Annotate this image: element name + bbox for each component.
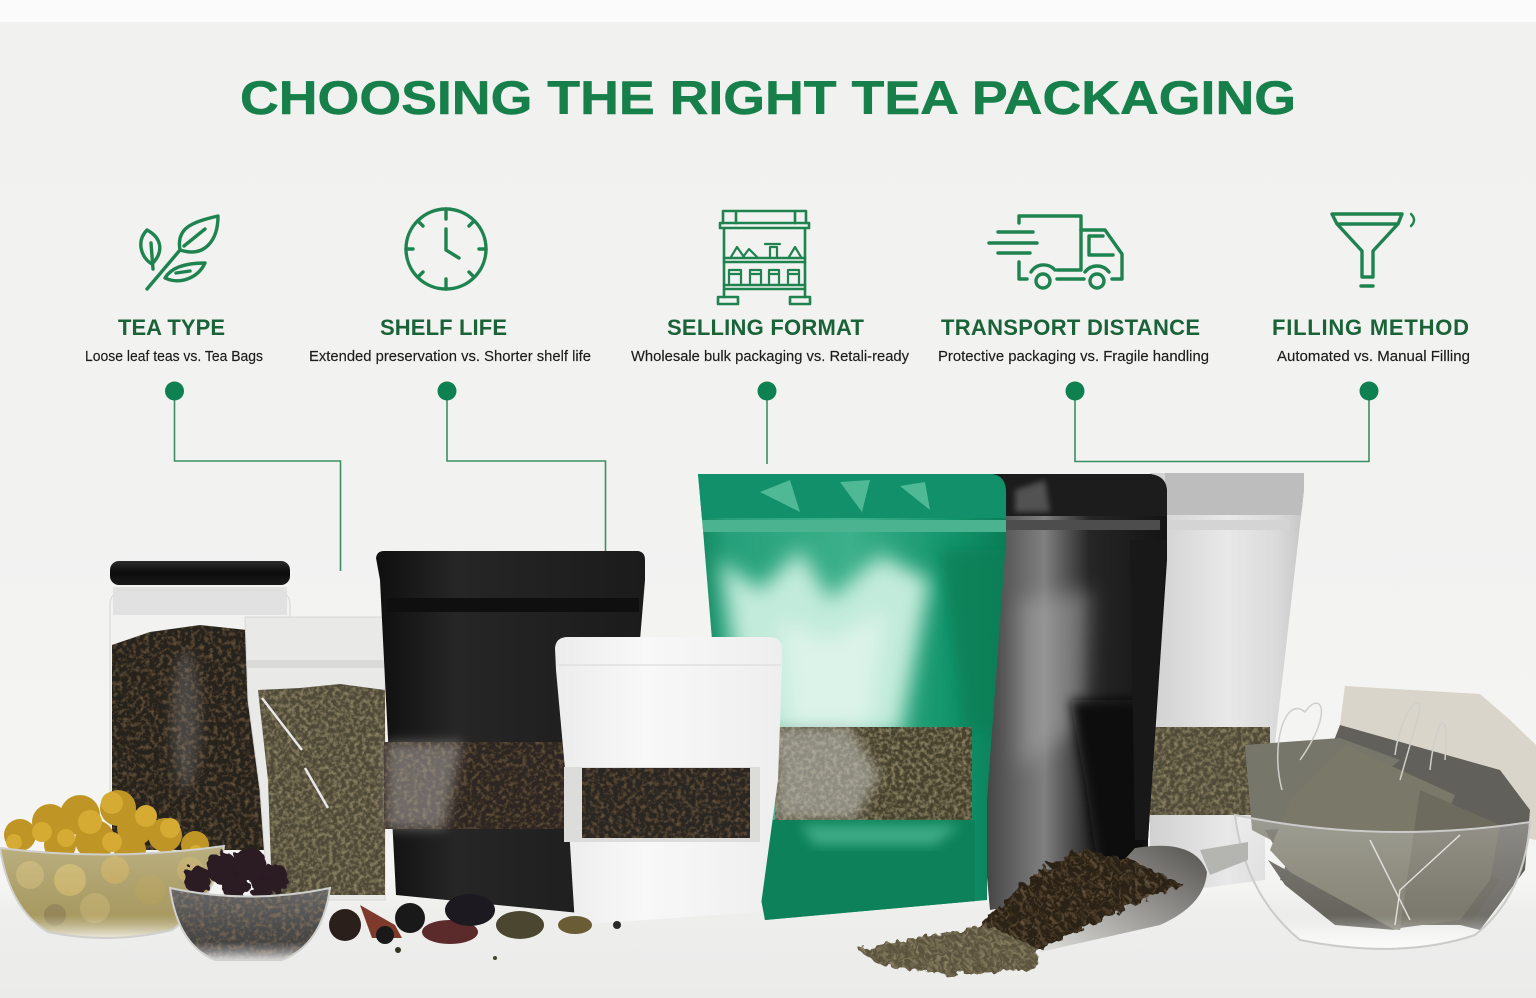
connector: transport and filling to pouches — [1066, 382, 1378, 462]
chamomile in glass bowl — [0, 790, 226, 940]
heading: filling method: FILLING METHOD — [1272, 315, 1469, 340]
description: filling method: Automated vs. Manual Filling — [1277, 348, 1470, 365]
icon: delivery truck — [989, 216, 1122, 288]
factor: transport distance — [938, 216, 1209, 365]
icon: funnel — [1332, 214, 1414, 286]
connector: selling format to green pouch — [758, 382, 776, 464]
black glossy pouch — [987, 474, 1167, 910]
tea bags in glass bowl — [1235, 686, 1536, 949]
metal scoop — [1040, 842, 1248, 952]
description: transport distance: Protective packaging vs. Fragile handling — [938, 348, 1209, 365]
factor: filling method — [1272, 214, 1470, 365]
description: selling format: Wholesale bulk packaging vs. Retali-ready — [631, 348, 909, 365]
description: shelf life: Extended preservation vs. Shorter shelf life — [309, 348, 591, 365]
heading: shelf life: SHELF LIFE — [380, 315, 507, 340]
green metallic pouch — [690, 470, 1010, 930]
product photo scene — [0, 470, 1536, 975]
scattered dried ingredients — [329, 894, 621, 960]
factor: tea type — [85, 216, 263, 365]
icon: clock — [406, 209, 486, 289]
title: CHOOSING THE RIGHT TEA PACKAGING — [240, 71, 1296, 124]
description: tea type: Loose leaf teas vs. Tea Bags — [85, 348, 263, 365]
heading: tea type: TEA TYPE — [118, 315, 225, 340]
factor: shelf life — [309, 209, 591, 365]
black matte pouch — [376, 551, 645, 915]
icon: tea leaves — [141, 216, 218, 289]
white pouch with window — [555, 637, 782, 925]
silver pouch — [1145, 470, 1310, 900]
glass jar of loose tea — [110, 561, 290, 870]
connector: shelf life to black pouch — [438, 382, 606, 551]
icon: retail shelf — [718, 211, 810, 304]
clear pouch — [245, 617, 385, 900]
heading: transport distance: TRANSPORT DISTANCE — [941, 315, 1200, 340]
factor: selling format — [631, 211, 909, 365]
dried berries in small glass bowl — [170, 848, 330, 961]
connector: tea type to jar — [165, 382, 340, 571]
loose tea pile — [858, 850, 1185, 975]
heading: selling format: SELLING FORMAT — [667, 315, 865, 340]
